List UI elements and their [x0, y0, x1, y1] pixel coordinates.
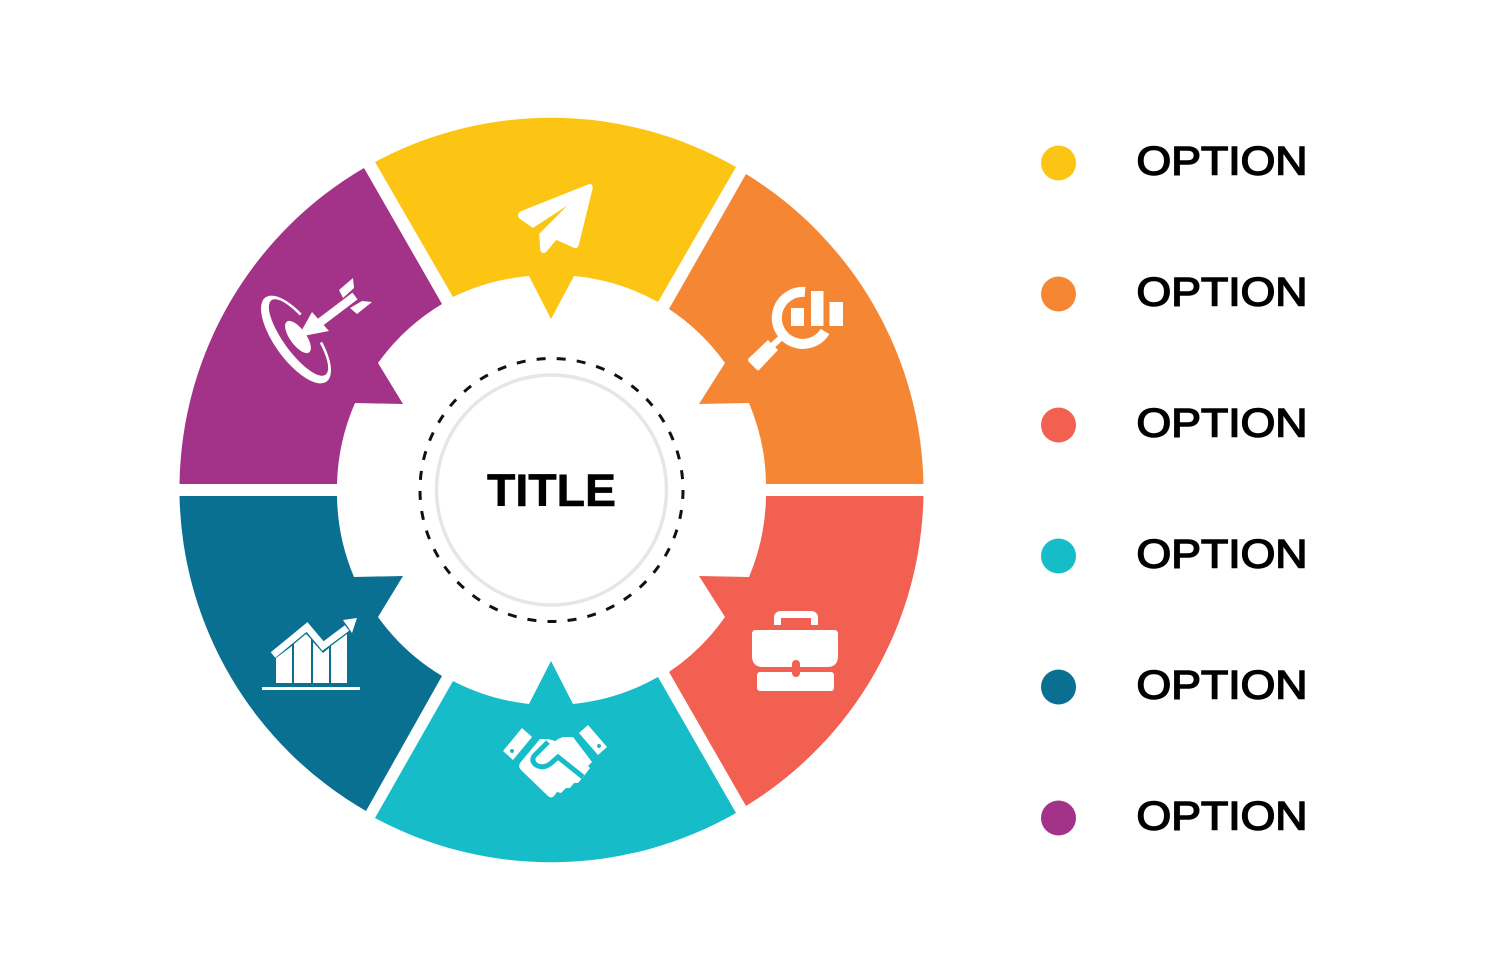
- legend row 3: coral red: OPTION: [1136, 402, 1308, 446]
- legend row 5: dark blue: [1041, 664, 1308, 708]
- legend row 5: dark blue: OPTION: [1136, 664, 1308, 708]
- title: TITLE: [487, 465, 616, 516]
- legend row 4: teal: OPTION: [1136, 532, 1308, 576]
- icon: briefcase: [752, 614, 838, 691]
- segment: teal: [375, 661, 736, 862]
- segment: yellow: [375, 118, 736, 319]
- segment: orange: [669, 174, 924, 484]
- legend: [1041, 140, 1308, 838]
- segment: coral red: [669, 496, 924, 806]
- segment: dark blue: [180, 496, 442, 811]
- legend row 1: yellow: [1041, 140, 1308, 184]
- legend row 6: purple: OPTION: [1136, 794, 1308, 838]
- icon: paper plane: [519, 185, 592, 252]
- icon: magnifier with bars: [748, 291, 843, 370]
- segment: purple: [180, 168, 442, 484]
- legend row 6: purple: [1041, 794, 1308, 838]
- legend row 2: orange: OPTION: [1136, 270, 1308, 314]
- icon: target with arrow: [248, 278, 372, 394]
- legend row 3: coral red: [1041, 402, 1308, 446]
- legend row 2: orange: [1041, 270, 1308, 314]
- legend row 4: teal: [1041, 532, 1308, 576]
- panel: wheel diagram: [180, 118, 924, 862]
- center badge: [420, 358, 683, 622]
- icon: rising chart: [262, 618, 360, 690]
- legend row 1: yellow: OPTION: [1136, 140, 1308, 184]
- icon: handshake: [503, 725, 607, 798]
